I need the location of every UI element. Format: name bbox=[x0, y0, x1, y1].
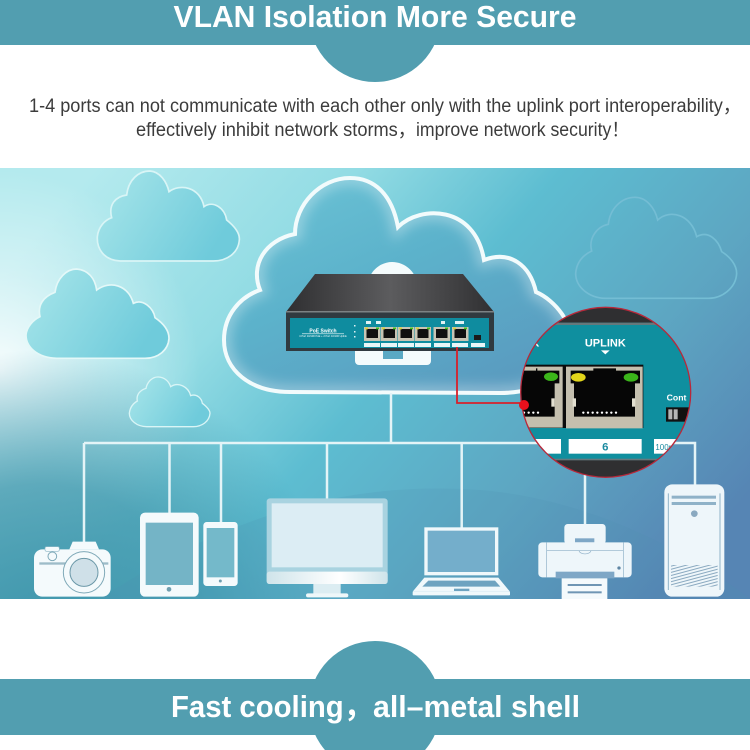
description text: effectively inhibit network storms， bbox=[136, 120, 416, 141]
magnified uplink port circle bbox=[517, 303, 697, 480]
magnified uplink port circle: 6 bbox=[602, 442, 608, 454]
description text bbox=[29, 96, 741, 141]
PoE switch product bbox=[286, 274, 494, 351]
switch label: 4 Port 10/100 PoE + 2 Port 10/100 Uplink bbox=[299, 334, 348, 338]
top banner bbox=[0, 0, 750, 82]
cloud: middle left bbox=[26, 269, 169, 358]
cloud: right outline bbox=[576, 197, 737, 298]
magnified uplink port circle: 100m bbox=[655, 443, 676, 452]
magnified uplink port circle: Cont bbox=[667, 393, 686, 403]
cloud: small lower left bbox=[129, 377, 210, 427]
icon: printer bbox=[538, 524, 632, 599]
network illustration panel bbox=[0, 168, 750, 599]
switch top face bbox=[286, 274, 494, 312]
red callout dot bbox=[519, 400, 529, 410]
network connection lines bbox=[84, 393, 695, 542]
icon: padlock behind switch bbox=[355, 262, 431, 365]
port indicator dots bbox=[354, 321, 464, 338]
switch label: PoE Switch bbox=[309, 328, 337, 334]
cloud: top left bbox=[97, 171, 239, 261]
icon: smartphone bbox=[203, 522, 238, 586]
top banner: VLAN Isolation More Secure bbox=[174, 0, 576, 34]
bottom banner: all–metal shell bbox=[373, 689, 580, 724]
icon: desktop monitor bbox=[267, 498, 388, 597]
switch front face bbox=[286, 311, 494, 351]
icon: laptop bbox=[413, 529, 510, 595]
bottom banner: Fast cooling， bbox=[171, 689, 373, 724]
cloud: central main bbox=[224, 178, 571, 393]
bottom banner bbox=[0, 641, 750, 750]
ethernet ports bbox=[364, 327, 468, 341]
icon: tablet bbox=[140, 513, 199, 597]
magnified uplink port circle: UPLINK bbox=[585, 338, 626, 350]
icon: camera bbox=[34, 542, 111, 597]
red callout line bbox=[457, 347, 524, 403]
description text: improve network security！ bbox=[416, 120, 629, 141]
icon: desktop tower bbox=[664, 484, 724, 597]
magnified uplink port circle: K bbox=[531, 338, 539, 350]
port number labels bbox=[364, 343, 485, 347]
switch label bbox=[299, 328, 348, 338]
control toggle bbox=[474, 335, 481, 340]
